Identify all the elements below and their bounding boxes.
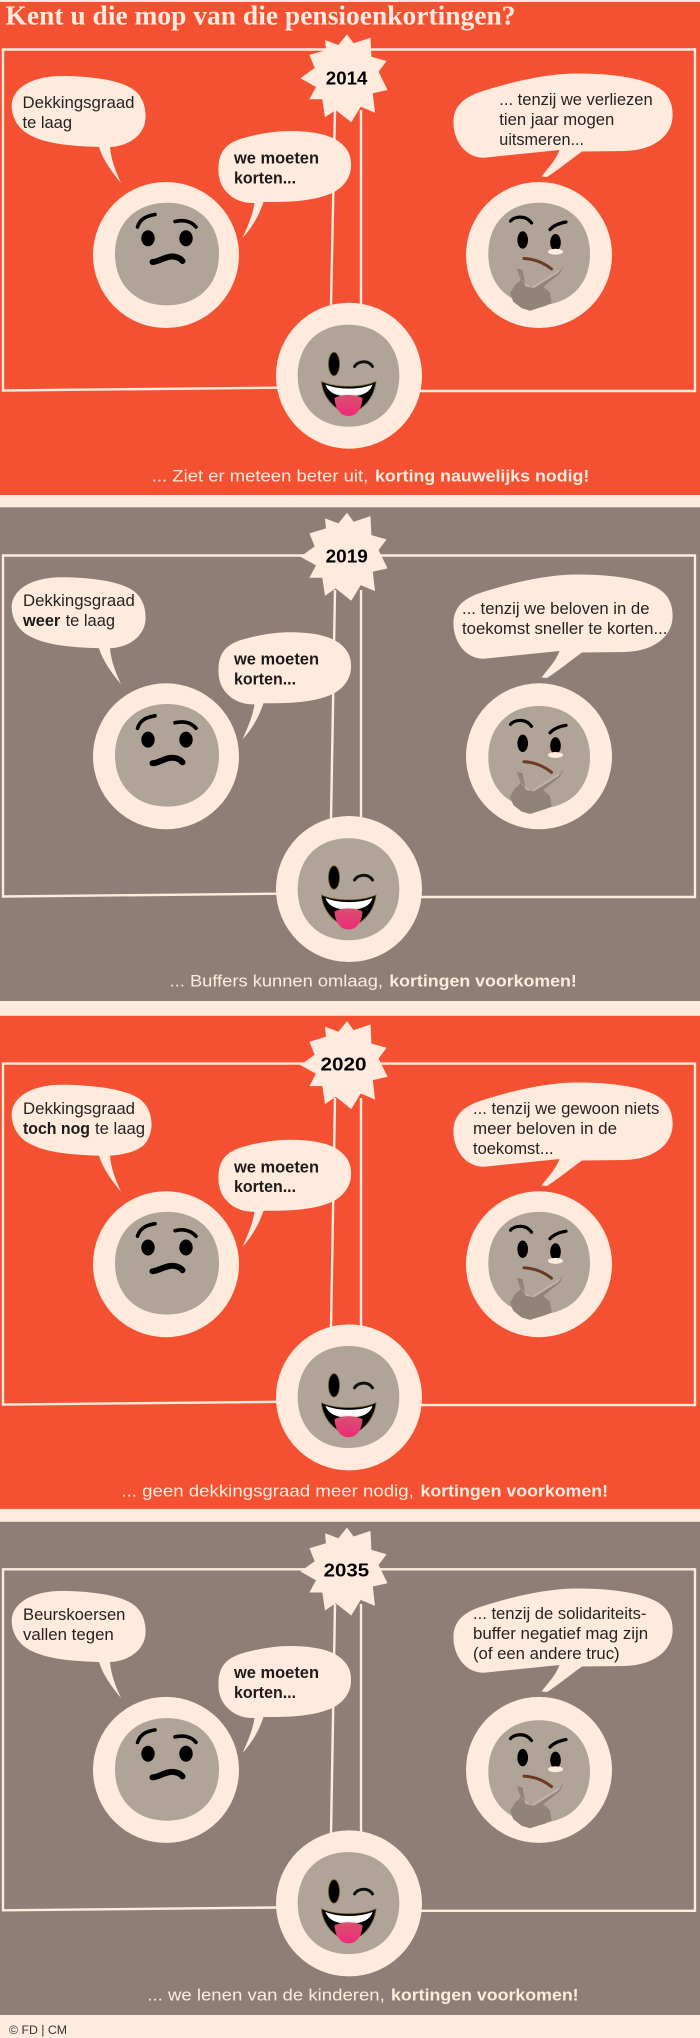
speech bubble: right: (of een andere truc) — [473, 1644, 620, 1663]
year starburst 2019: 2019 — [326, 546, 368, 566]
caption: korting nauwelijks nodig! — [375, 467, 589, 486]
year starburst 2014 — [300, 34, 388, 122]
face: thinking — [466, 683, 612, 829]
face: worried — [93, 683, 239, 829]
speech bubble: left: toch nog — [23, 1119, 90, 1138]
face: winking — [276, 1830, 422, 1976]
speech bubble: left: Dekkingsgraad — [23, 1099, 135, 1118]
speech bubble: right: ... tenzij we verliezen — [499, 90, 653, 109]
speech bubble: left — [12, 577, 146, 684]
speech bubble: left: Dekkingsgraad — [22, 93, 134, 112]
speech bubble: right: tien jaar mogen — [499, 110, 614, 129]
speech bubble: right: ... tenzij we gewoon niets — [473, 1099, 659, 1118]
speech bubble: right: uitsmeren... — [499, 130, 584, 149]
speech bubble: middle: korten... — [234, 1177, 296, 1196]
speech bubble: right: toekomst sneller te korten... — [462, 619, 667, 638]
speech bubble: left: Dekkingsgraad — [23, 591, 135, 610]
face: winking — [276, 1324, 422, 1470]
speech bubble: right — [453, 1588, 673, 1692]
year starburst 2035: 2035 — [324, 1560, 369, 1580]
speech bubble: left — [12, 1591, 146, 1698]
speech bubble: left: weer — [22, 611, 61, 630]
speech bubble: middle: korten... — [234, 1683, 296, 1702]
caption: kortingen voorkomen! — [420, 1482, 608, 1500]
year starburst 2020: 2020 — [320, 1055, 366, 1075]
speech bubble: middle: korten... — [234, 168, 296, 187]
speech bubble: left: te laag — [66, 611, 115, 630]
caption: kortingen voorkomen! — [391, 1986, 579, 2005]
panel: 2035 — [0, 1522, 700, 2015]
speech bubble: middle — [218, 1646, 351, 1753]
face: winking — [276, 816, 422, 962]
frame — [3, 50, 695, 391]
panel: 2014 — [0, 0, 700, 495]
speech bubble: middle — [218, 131, 351, 238]
year starburst 2019 — [300, 513, 388, 601]
caption — [170, 972, 577, 991]
year starburst 2020 — [300, 1021, 388, 1109]
speech bubble: middle: korten... — [234, 669, 296, 688]
speech bubble: middle: we moeten — [233, 1157, 319, 1176]
speech bubble: right — [453, 1082, 673, 1186]
caption: kortingen voorkomen! — [389, 972, 577, 991]
speech bubble: right: buffer negatief mag zijn — [473, 1624, 648, 1643]
speech bubble: middle: we moeten — [233, 1663, 319, 1682]
caption — [152, 467, 589, 486]
face: thinking — [466, 182, 612, 328]
face: thinking — [466, 1697, 612, 1843]
speech bubble: right: ... tenzij de solidariteits- — [473, 1604, 646, 1623]
caption: ... we lenen van de kinderen, — [147, 1986, 385, 2005]
face: winking — [276, 303, 422, 449]
speech bubble: right: meer beloven in de — [473, 1119, 617, 1138]
footer credit: © FD | CM — [9, 2025, 67, 2037]
speech bubble: left: te laag — [22, 113, 72, 132]
face: worried — [93, 1697, 239, 1843]
face: worried — [93, 182, 239, 328]
speech bubble: left: te laag — [95, 1119, 145, 1138]
frame — [3, 1569, 695, 1911]
speech bubble: middle — [218, 1140, 351, 1247]
speech bubble: right — [453, 73, 673, 177]
speech bubble: middle: we moeten — [233, 148, 319, 167]
year starburst 2035 — [300, 1528, 388, 1616]
face: worried — [93, 1191, 239, 1337]
frame — [3, 1064, 695, 1405]
caption: ... Buffers kunnen omlaag, — [170, 972, 383, 991]
speech bubble: left — [12, 76, 146, 183]
speech bubble: right: toekomst... — [473, 1139, 554, 1158]
face: thinking — [466, 1191, 612, 1337]
speech bubble: left: Beurskoersen — [23, 1605, 125, 1624]
speech bubble: left — [12, 1085, 152, 1192]
frame — [3, 556, 695, 897]
year starburst 2014: 2014 — [326, 68, 367, 88]
panel: 2020 — [0, 1016, 700, 1509]
speech bubble: middle — [218, 632, 351, 739]
caption — [147, 1986, 579, 2005]
speech bubble: right: ... tenzij we beloven in de — [462, 599, 650, 618]
caption: ... geen dekkingsgraad meer nodig, — [121, 1482, 414, 1500]
speech bubble: left: vallen tegen — [23, 1625, 114, 1644]
title: Kent u die mop van die pensioenkortingen? — [6, 0, 516, 30]
panel: 2019 — [0, 507, 700, 1001]
speech bubble: right — [453, 574, 673, 678]
caption: ... Ziet er meteen beter uit, — [152, 467, 368, 486]
speech bubble: middle: we moeten — [233, 649, 319, 668]
caption — [121, 1482, 608, 1500]
